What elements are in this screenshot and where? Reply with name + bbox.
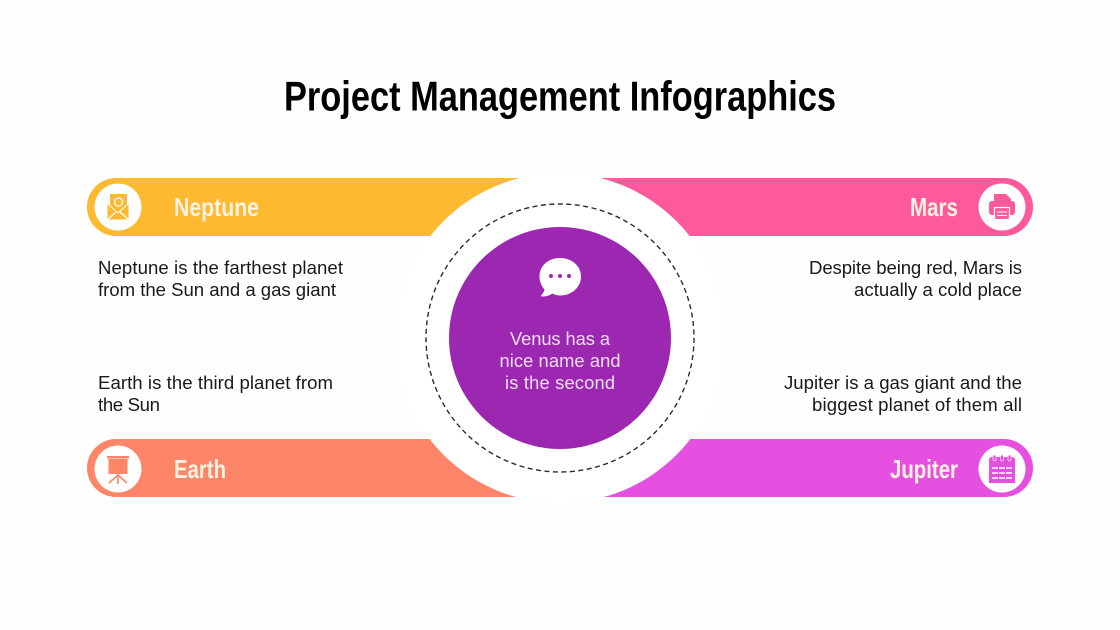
label: Earth: Earth [174,454,226,484]
label: Jupiter: Jupiter [890,454,958,484]
icon: presentation board [94,446,142,492]
center purple circle [449,227,671,449]
text: Neptune [98,257,344,300]
bar: Jupiter [560,439,1033,497]
center text: is the second [505,372,615,393]
text: Earth: the Sun [98,394,160,415]
icon: printer [978,184,1026,230]
dashed ring [426,204,694,472]
text: Earth [98,372,333,415]
bar: Neptune [87,178,560,236]
text: Mars [809,257,1022,300]
label: Neptune: Neptune [174,192,259,222]
label: Mars: Mars [910,192,958,222]
title: Project Management Infographics [284,72,836,120]
text: Jupiter: Jupiter is a gas giant and the [784,372,1022,393]
text: Mars: actually a cold place [854,279,1022,300]
bar: Mars [560,178,1033,236]
icon: envelope [94,184,142,230]
text: Jupiter [784,372,1022,415]
icon: speech bubble [540,258,581,296]
icon: calendar [978,446,1026,492]
text: Neptune: from the Sun and a gas giant [98,279,337,300]
text: Jupiter: biggest planet of them all [812,394,1022,415]
white center disc [395,173,725,503]
text: Mars: Despite being red, Mars is [809,257,1022,278]
bar: Earth [87,439,560,497]
text: Earth: Earth is the third planet from [98,372,333,393]
center text: nice name and [500,350,620,371]
center text [500,328,620,393]
text: Neptune: Neptune is the farthest planet [98,257,344,278]
center text: Venus has a [510,328,611,349]
